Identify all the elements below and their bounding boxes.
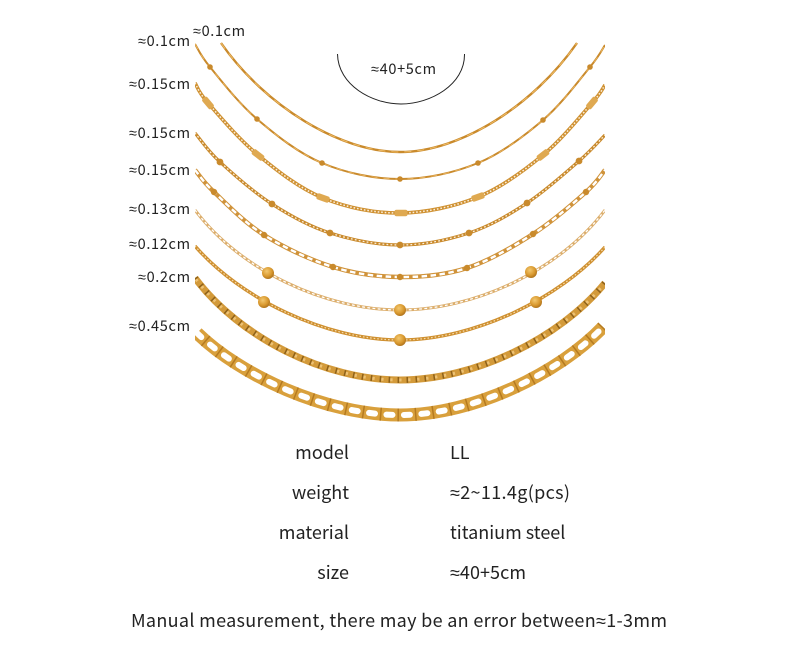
necklace photo: nine layered gold chains <box>195 43 605 415</box>
row: weight: ≈2~11.4g(pcs) <box>450 479 570 505</box>
label: chain 8 width: ≈0.2cm <box>138 266 190 287</box>
chain 2: thin chain with small beads <box>195 44 605 182</box>
label: chain 5 width: ≈0.15cm <box>129 159 190 180</box>
row: size: ≈40+5cm <box>450 559 526 585</box>
chain 9: wide curb link chain <box>197 327 603 415</box>
row: model: LL <box>450 439 470 465</box>
label: chain 2 width: ≈0.1cm <box>138 30 190 51</box>
chain 6: delicate chain with round balls <box>195 210 605 316</box>
label: chain 4 width: ≈0.15cm <box>129 122 190 143</box>
length indicator: necklace loop with size <box>338 54 465 104</box>
row: material: titanium steel <box>450 519 565 545</box>
chain 3: curb chain with bar links <box>195 83 605 216</box>
row: material: material <box>279 519 349 545</box>
footnote: Manual measurement, there may be an error between≈1-3mm <box>131 607 667 633</box>
length indicator: necklace loop with size: ≈40+5cm <box>371 58 436 79</box>
chain 7: box chain with round balls <box>195 246 605 346</box>
chain 8: twisted rope chain <box>195 278 605 380</box>
row: size <box>317 559 526 585</box>
label: chain 1 top width: ≈0.1cm <box>193 20 245 41</box>
label: chain 6 width: ≈0.13cm <box>129 198 190 219</box>
row: weight <box>292 479 570 505</box>
label: chain 9 width: ≈0.45cm <box>129 315 190 336</box>
chain 4: curb chain with beads <box>195 133 605 248</box>
spec table <box>279 439 570 585</box>
label: chain 3 width: ≈0.15cm <box>129 73 190 94</box>
width labels <box>129 20 245 336</box>
chain 1: fine snake chain <box>221 43 577 152</box>
chain 5: open cable chain with beads <box>195 170 605 280</box>
row: size: size <box>317 559 349 585</box>
label: chain 7 width: ≈0.12cm <box>129 233 190 254</box>
row: model: model <box>295 439 349 465</box>
row: material <box>279 519 565 545</box>
row: weight: weight <box>292 479 349 505</box>
row: model <box>295 439 470 465</box>
